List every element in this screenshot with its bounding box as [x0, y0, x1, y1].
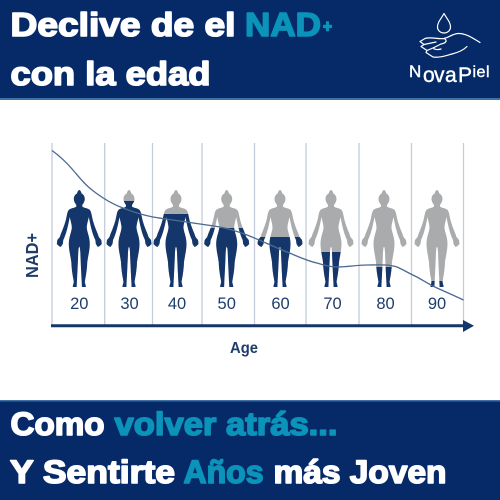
age labels: 30	[120, 295, 139, 313]
bottom text line 1	[10, 406, 338, 442]
figure age 70	[308, 190, 354, 287]
bottom text line 2: más Joven	[274, 454, 446, 490]
figure age 60	[258, 190, 302, 287]
icon: water drop and hand	[420, 14, 480, 57]
grid lines	[52, 143, 464, 325]
x axis label: Age	[230, 340, 258, 357]
figure age 20	[57, 190, 102, 287]
age labels: 70	[323, 295, 342, 313]
age labels: 20	[70, 295, 88, 313]
bottom text line 2	[10, 454, 446, 490]
y axis label: NAD+	[22, 233, 42, 278]
bottom text line 2: Años	[184, 454, 264, 490]
bottom text line 1: volver atrás...	[114, 406, 338, 442]
logo wordmark: iel	[472, 64, 490, 81]
top banner	[0, 0, 500, 100]
figure age 30	[106, 190, 152, 287]
figure age 50	[204, 190, 249, 287]
chart: NAD+ decline by age	[22, 143, 474, 357]
age labels: 40	[168, 295, 186, 313]
figure age 40	[154, 190, 198, 287]
figure age 90	[414, 190, 460, 287]
age labels: 80	[376, 295, 395, 313]
figure age 80	[362, 190, 406, 287]
logo wordmark: N	[409, 62, 421, 81]
bottom banner	[0, 400, 500, 500]
bottom text line 1: Como	[10, 406, 104, 442]
bottom text line 2: Y Sentirte	[10, 454, 175, 490]
age labels: 50	[218, 295, 236, 313]
title: con la edad	[10, 55, 210, 92]
x axis arrow	[51, 320, 474, 332]
title: Declive de el	[10, 6, 235, 43]
logo: NovaPiel	[409, 14, 490, 87]
title: NAD	[245, 6, 321, 43]
title: +	[323, 17, 332, 36]
age labels	[70, 295, 446, 313]
decline curve	[52, 150, 464, 300]
logo wordmark: P	[458, 64, 472, 87]
age labels: 90	[428, 295, 446, 313]
title	[10, 6, 332, 92]
age labels: 60	[271, 295, 290, 313]
logo wordmark: ova	[423, 64, 457, 87]
